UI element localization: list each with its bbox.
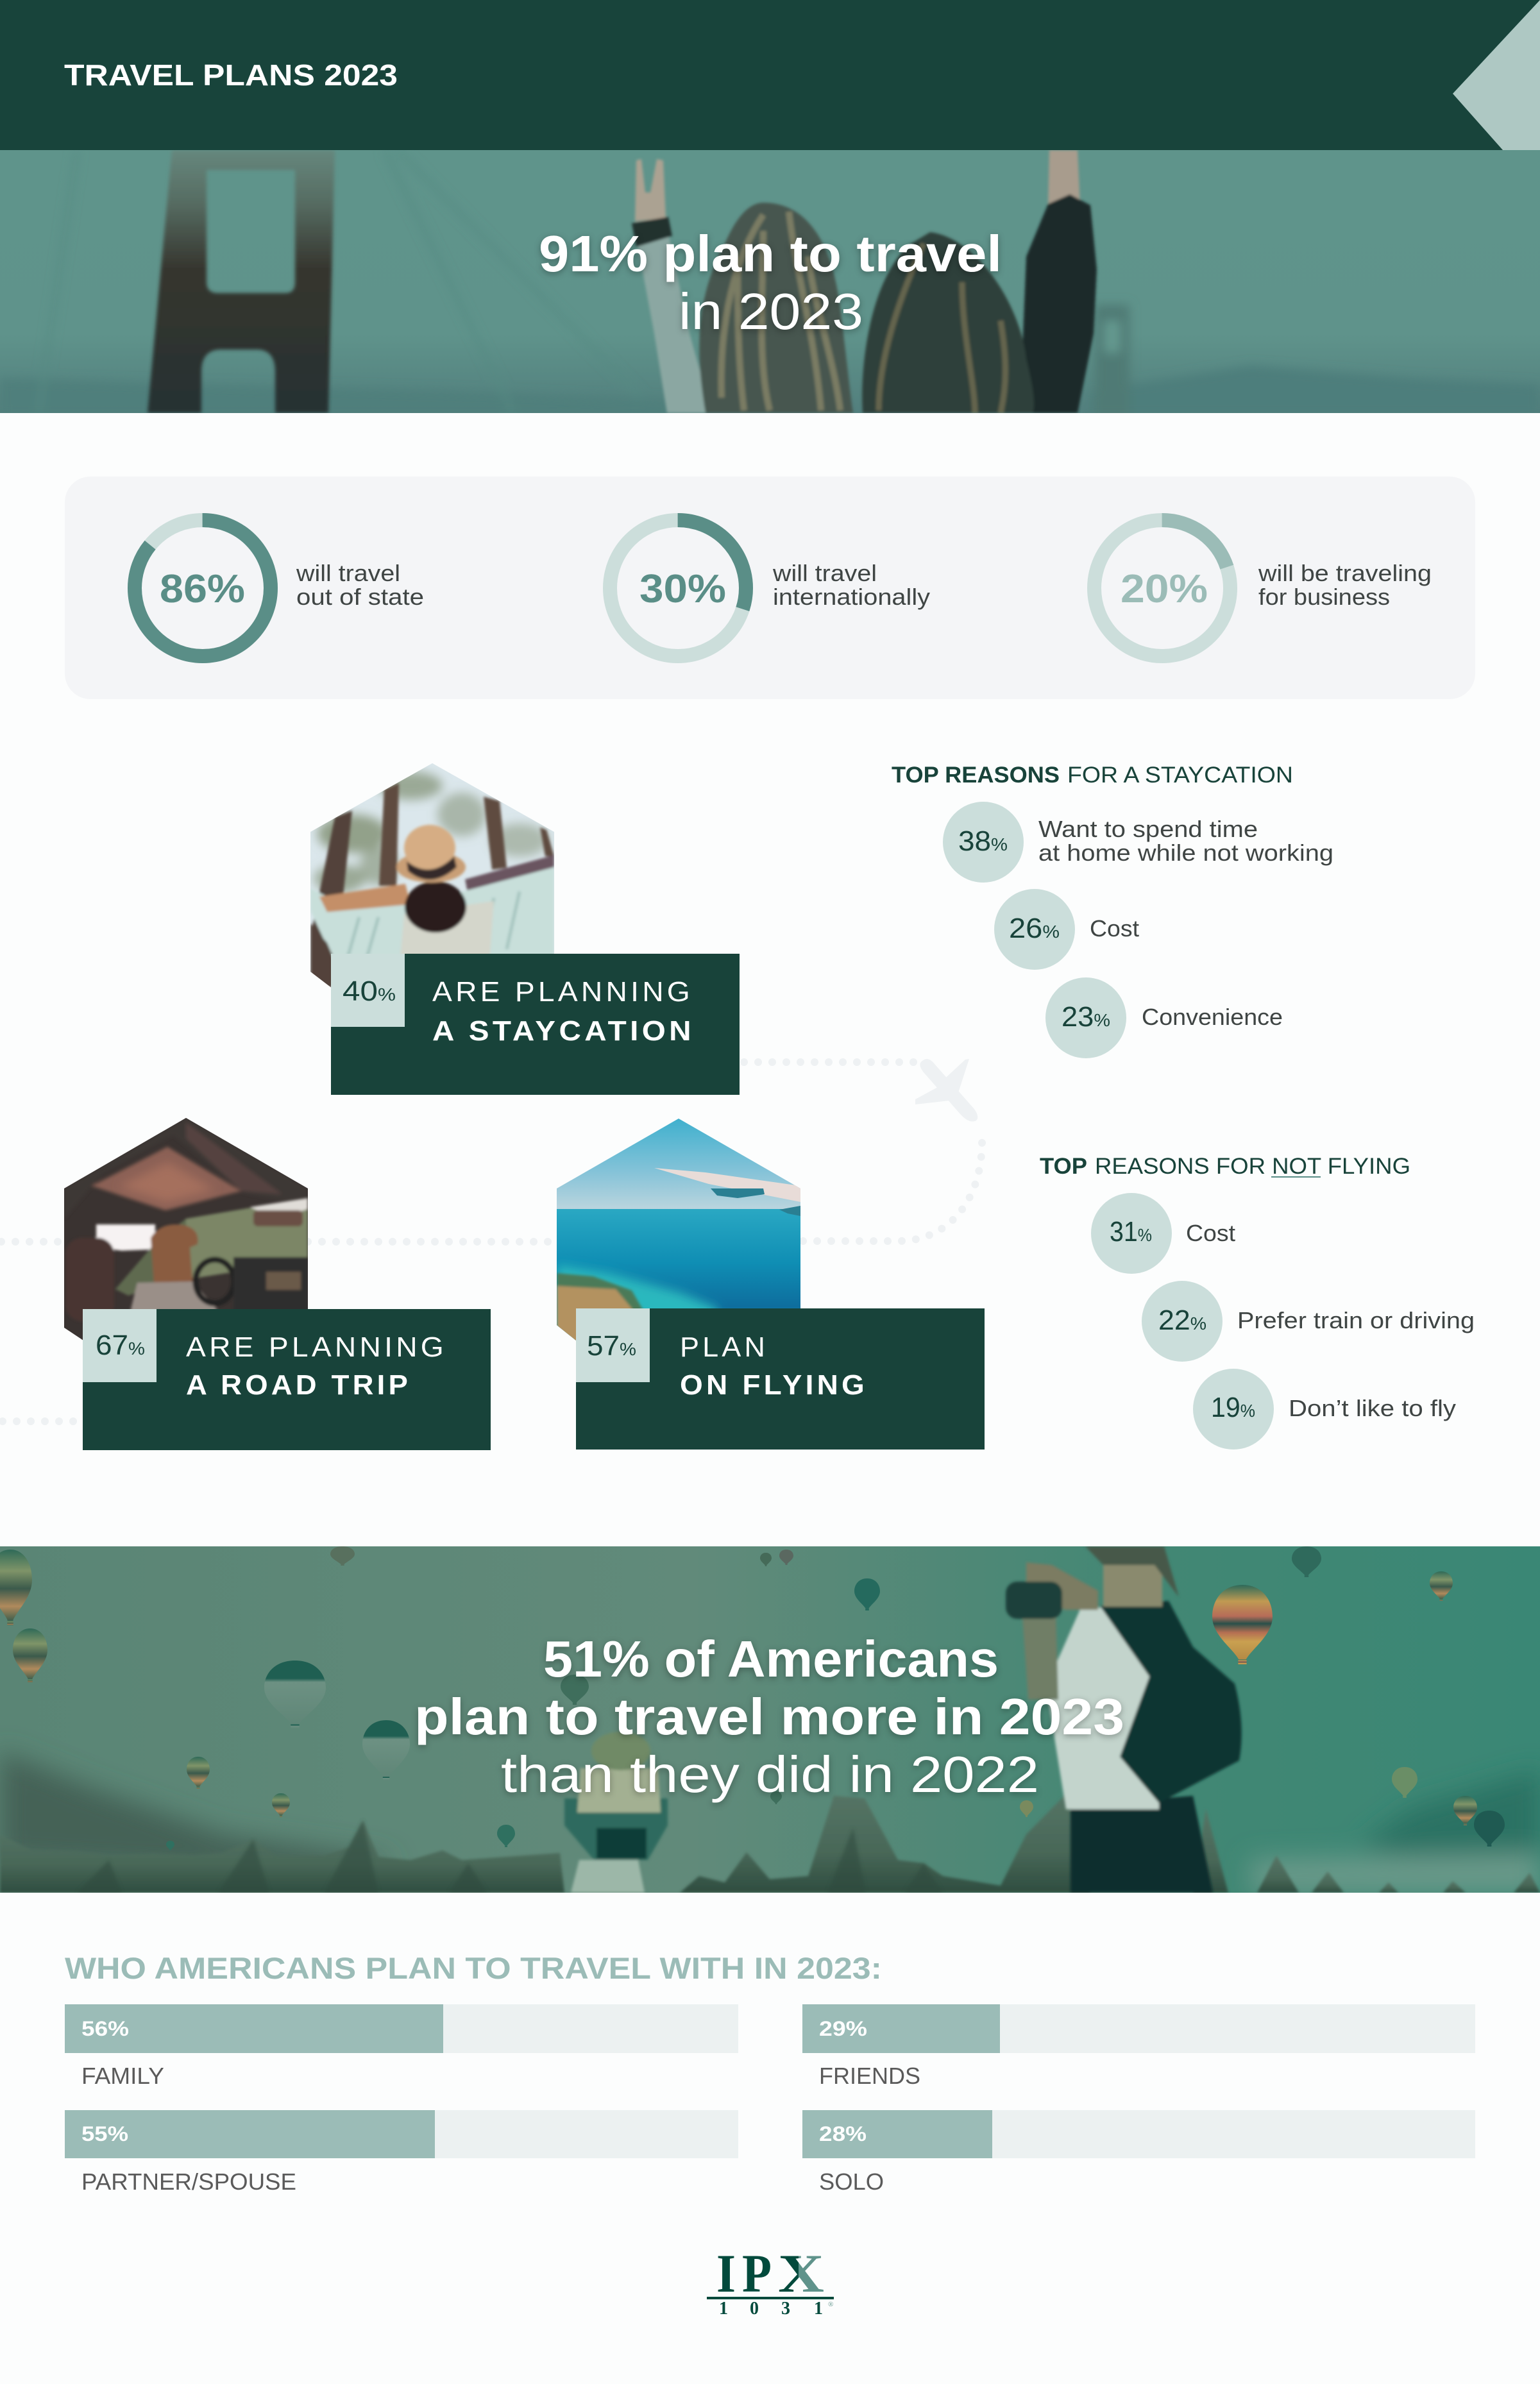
- reason 19%: Don’t like to fly: [1289, 1395, 1456, 1421]
- bar: partner/spouse 55%: PARTNER/SPOUSE: [81, 2168, 296, 2195]
- reason 26%: 26%: [1009, 913, 1060, 944]
- reason 19%: 19%: [1211, 1392, 1255, 1423]
- reason 38%: Want to spend time: [1038, 816, 1258, 842]
- card: road trip: 67%: [96, 1330, 145, 1361]
- ring: 86% out of state: out of state: [296, 584, 424, 610]
- list: top reasons for not flying: REASONS FOR NOT FLYING: [1095, 1154, 1410, 1179]
- logo: IPX 1031: ®: [828, 2301, 833, 2308]
- ring: 20% business: 20%: [1121, 567, 1208, 611]
- bar: family 56%: 56%: [81, 2017, 129, 2040]
- reason 23%: Convenience: [1142, 1004, 1283, 1030]
- card: staycation: 40%: [343, 976, 396, 1007]
- hero headline: 91% plan to travel: [539, 225, 1002, 282]
- bar: partner/spouse 55%: 55%: [81, 2122, 128, 2145]
- card: staycation: ARE PLANNING: [432, 976, 693, 1008]
- bar: family 56%: FAMILY: [81, 2063, 164, 2089]
- card: flying: [576, 1308, 985, 1450]
- hero headline: [538, 233, 1001, 334]
- photo: road trip jeep interior: [64, 1118, 308, 1342]
- logo: IPX 1031: 0: [750, 2299, 759, 2319]
- header title: TRAVEL PLANS 2023: [64, 58, 398, 92]
- ring: 86% out of state: [135, 520, 424, 656]
- list: top reasons for not flying: TOP: [1040, 1154, 1087, 1179]
- card: flying: PLAN: [680, 1331, 768, 1363]
- reason 22%: Prefer train or driving: [1237, 1307, 1475, 1333]
- bar: family 56%: [65, 2004, 738, 2089]
- dotted flight path: [1, 1062, 982, 1421]
- card: staycation: [331, 954, 740, 1095]
- left woman: [632, 159, 853, 413]
- list: top reasons for a staycation: TOP REASONS: [892, 763, 1060, 788]
- reason 22%: [1142, 1281, 1475, 1362]
- photographer: [1006, 1546, 1242, 1893]
- banner headline: plan to travel more in 2023: [414, 1688, 1124, 1745]
- ring: 86% out of state: 86%: [160, 567, 245, 611]
- reason 26%: Cost: [1090, 915, 1139, 942]
- logo: IPX 1031: P: [742, 2244, 772, 2304]
- photo: airplane wing over sea: [557, 1119, 800, 1344]
- logo: IPX 1031: 1: [719, 2299, 728, 2319]
- reason 31%: Cost: [1186, 1220, 1235, 1246]
- card: staycation: A STAYCATION: [432, 1015, 695, 1047]
- header band: [0, 0, 1540, 150]
- banner headline: than they did in 2022: [501, 1746, 1039, 1803]
- bar: solo 28%: 28%: [819, 2122, 867, 2145]
- logo: IPX 1031: I: [716, 2244, 736, 2304]
- banner headline: 51% of Americans: [543, 1630, 999, 1687]
- rock formations: [0, 1789, 1540, 1893]
- reason 31%: [1091, 1193, 1235, 1274]
- bar: solo 28%: [802, 2110, 1475, 2195]
- card: flying: 57%: [587, 1330, 636, 1362]
- reason 38%: 38%: [958, 825, 1008, 857]
- icon: airplane: [915, 1059, 977, 1122]
- reason 26%: [994, 889, 1139, 970]
- reason 38%: [943, 802, 1333, 883]
- ring: 30% internationally: [610, 520, 930, 656]
- logo: IPX 1031: [707, 2244, 834, 2319]
- reason 22%: 22%: [1158, 1305, 1206, 1336]
- photo: hammock staycation: [310, 763, 554, 988]
- header corner triangle: [1453, 0, 1540, 150]
- right woman: [862, 150, 1097, 413]
- panel: travel stats: [65, 477, 1475, 699]
- banner headline: [414, 1630, 1124, 1803]
- bar: friends 29%: 29%: [819, 2017, 867, 2040]
- ring: 20% business: [1094, 520, 1432, 656]
- card: road trip: ARE PLANNING: [186, 1331, 447, 1363]
- reason 38%: at home while not working: [1038, 840, 1333, 866]
- list: top reasons for a staycation: [892, 763, 1333, 1058]
- hero headline: in 2023: [679, 283, 863, 340]
- woman with hat: [564, 1732, 668, 1893]
- ring: 86% out of state: will travel: [296, 560, 400, 586]
- ring: 30% internationally: internationally: [773, 584, 930, 610]
- hero photo: friends on bridge: [0, 150, 1540, 417]
- ring: 30% internationally: will travel: [772, 560, 877, 586]
- card: road trip: [83, 1309, 491, 1450]
- bar: friends 29%: [802, 2004, 1475, 2089]
- card: flying: ON FLYING: [680, 1369, 868, 1401]
- reason 23%: [1045, 977, 1283, 1058]
- balloons: [0, 1546, 1505, 1850]
- logo: IPX 1031: 3: [781, 2299, 790, 2319]
- bar: friends 29%: FRIENDS: [819, 2063, 920, 2089]
- section heading: who americans travel with: WHO AMERICANS PLAN TO TRAVEL WITH IN 2023:: [65, 1951, 882, 1985]
- reason 19%: [1193, 1369, 1456, 1450]
- logo: IPX 1031: X: [778, 2244, 824, 2304]
- card: road trip: A ROAD TRIP: [186, 1369, 411, 1401]
- logo: IPX 1031: 1: [814, 2299, 823, 2319]
- ring: 20% business: will be traveling: [1258, 560, 1432, 586]
- ring: 30% internationally: 30%: [639, 567, 726, 611]
- bridge tower: [148, 150, 335, 413]
- reason 23%: 23%: [1062, 1001, 1110, 1033]
- list: top reasons for a staycation: FOR A STAYCATION: [1067, 763, 1293, 788]
- reason 31%: 31%: [1110, 1216, 1152, 1247]
- rock shading: [77, 1820, 943, 1893]
- bar: solo 28%: SOLO: [819, 2168, 884, 2195]
- hero photo: balloons and photographer: [0, 1546, 1540, 1893]
- list: top reasons for not flying: [1040, 1154, 1475, 1450]
- ring: 20% business: for business: [1258, 584, 1390, 610]
- bar: partner/spouse 55%: [65, 2110, 738, 2195]
